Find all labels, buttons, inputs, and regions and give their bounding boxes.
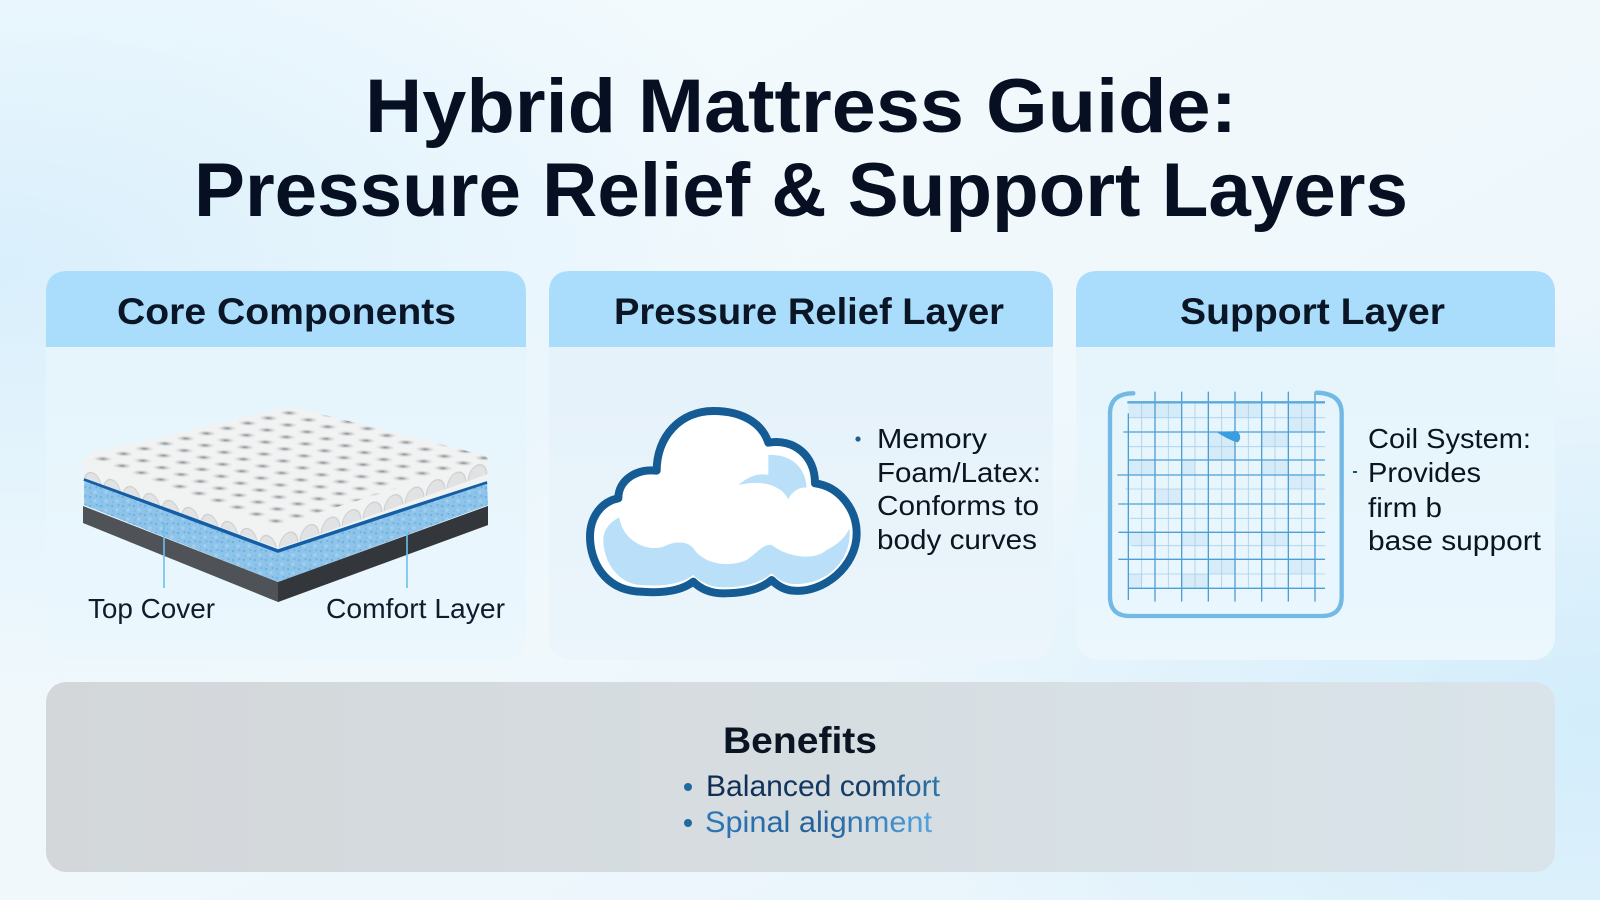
benefit: spinal alignment: Spinal alignment — [705, 806, 933, 839]
icon: coil grid — [1110, 392, 1342, 616]
bullet — [855, 436, 861, 442]
header: core components: Core Components — [117, 291, 456, 332]
title: Hybrid Mattress Guide: — [365, 64, 1237, 149]
header: pressure relief layer — [549, 271, 1053, 347]
top cover — [84, 407, 488, 548]
title — [194, 64, 1408, 233]
title: Pressure Relief & Support Layers — [194, 148, 1408, 233]
header: pressure relief layer: Pressure Relief Layer — [614, 291, 1004, 332]
text: coil system: Provides — [1368, 457, 1481, 488]
text: coil system: Coil System: — [1368, 423, 1531, 454]
heading: benefits: Benefits — [723, 720, 877, 761]
benefit: balanced comfort: Balanced comfort — [706, 770, 941, 803]
panel: pressure relief layer — [549, 271, 1053, 660]
text: coil system — [1368, 423, 1541, 556]
text: coil system: base support — [1368, 525, 1541, 556]
label: top cover: Top Cover — [88, 593, 215, 624]
comfort foam layer — [84, 478, 488, 582]
header: core components — [46, 271, 526, 347]
text: memory foam: body curves — [877, 524, 1037, 555]
panel: benefits — [46, 682, 1555, 872]
bullet — [1353, 471, 1357, 473]
panel: support layer — [1076, 271, 1555, 660]
text: memory foam — [877, 423, 1041, 555]
text: memory foam: Conforms to — [877, 490, 1039, 521]
header: support layer: Support Layer — [1180, 291, 1445, 332]
header: support layer — [1076, 271, 1555, 347]
icon: cloud — [590, 411, 857, 593]
text: coil system: firm b — [1368, 492, 1442, 523]
text: memory foam: Foam/Latex: — [877, 457, 1041, 488]
panel: core components — [46, 271, 526, 660]
leader lines — [164, 523, 407, 588]
label: comfort layer: Comfort Layer — [326, 593, 505, 624]
icon: layered mattress — [83, 407, 488, 602]
base layer — [83, 506, 488, 602]
text: memory foam: Memory — [877, 423, 987, 454]
